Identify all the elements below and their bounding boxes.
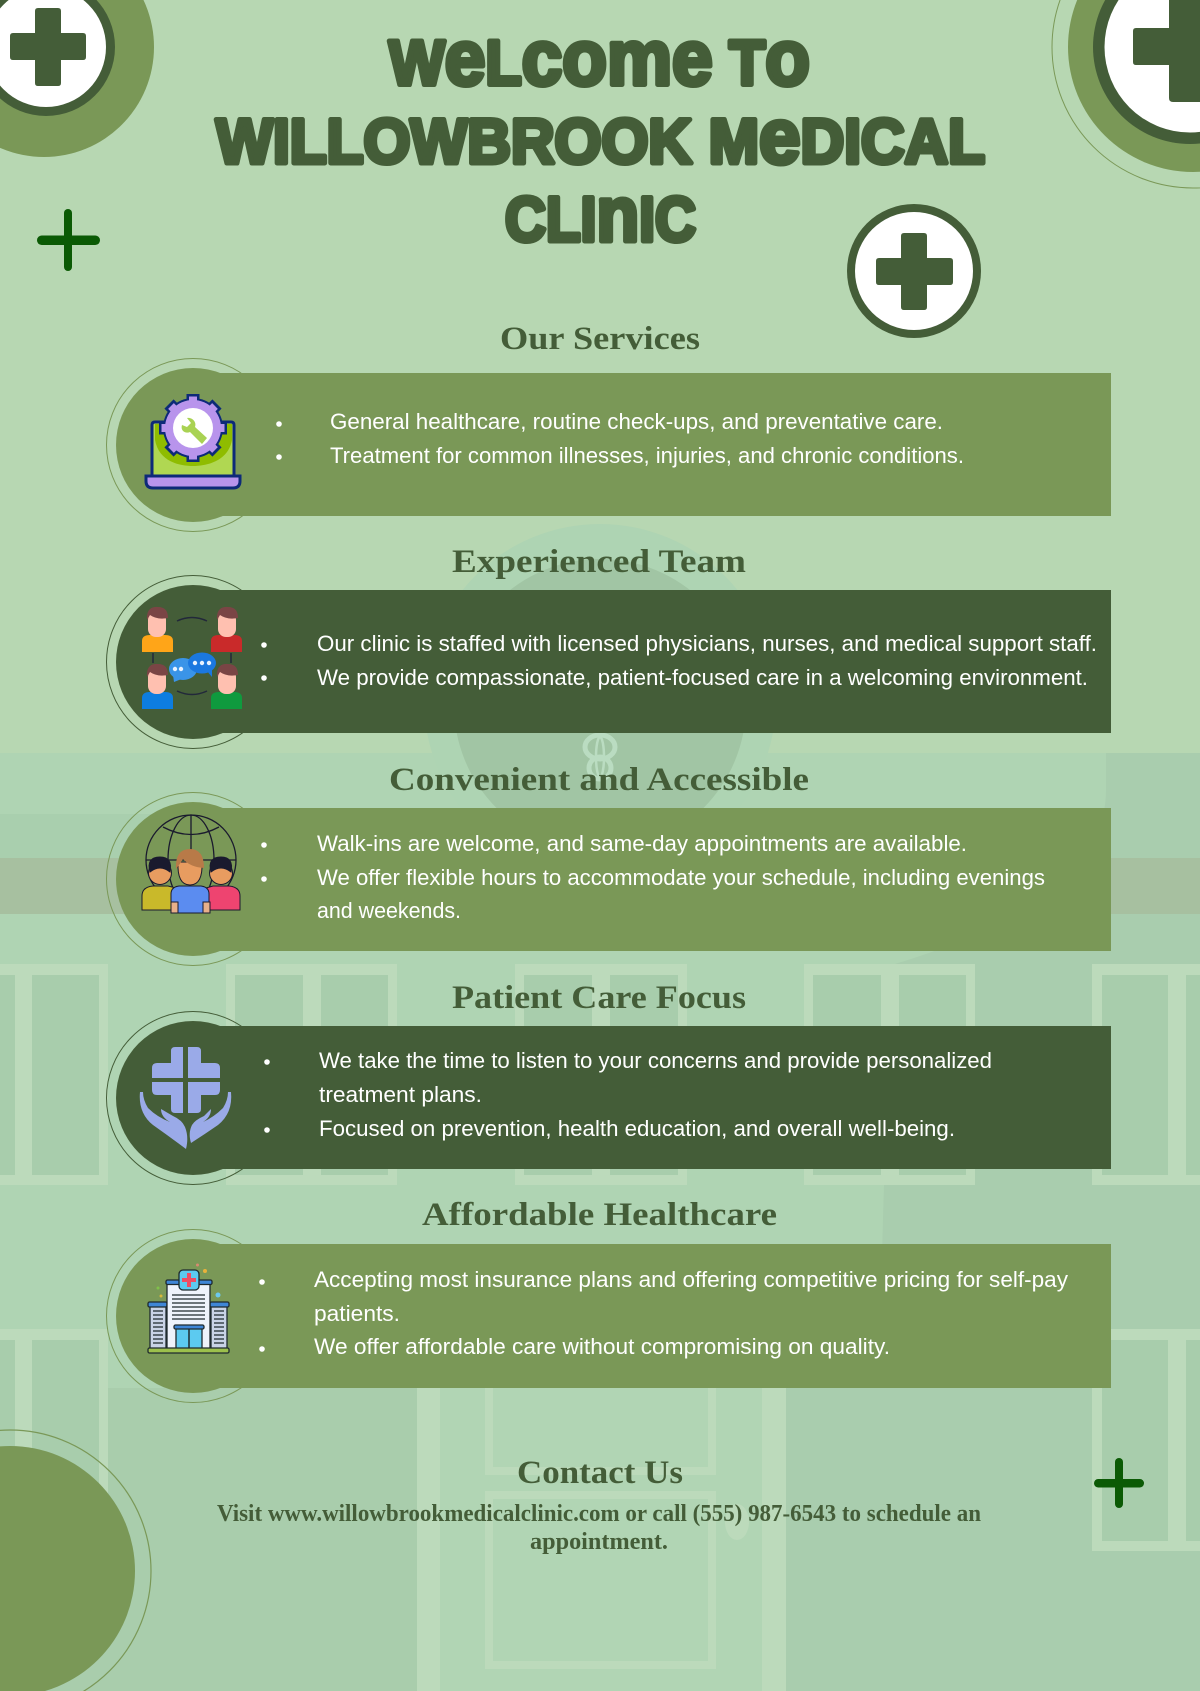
- panel: Experienced Team: [106, 576, 1111, 748]
- heading: Contact Us: Contact Us: [517, 1455, 683, 1491]
- bullet list: We provide compassionate, patient-focused care in a welcoming environment.: [317, 665, 1088, 690]
- icon: cross held by hands: [140, 1047, 231, 1149]
- bullet list: Walk-ins are welcome, and same-day appointments are available.: [317, 831, 967, 856]
- decorative plus: lower right: [1094, 1458, 1144, 1508]
- bullet list: Accepting most insurance plans and offering competitive pricing for self-pay: [314, 1267, 1069, 1292]
- upper windows: [0, 964, 1200, 1691]
- icon: laptop with gear and wrench: [146, 394, 240, 488]
- bullet list: [264, 1048, 992, 1141]
- bullet list: General healthcare, routine check-ups, and preventative care.: [330, 409, 943, 434]
- decorative badge: medical cross under title: [847, 204, 981, 338]
- bullet list: and weekends.: [317, 898, 461, 923]
- title: CLInIC: [505, 170, 696, 258]
- decorative badge: top right medical cross: [1052, 0, 1200, 188]
- bullet list: We offer flexible hours to accommodate your schedule, including evenings: [317, 865, 1045, 890]
- caduceus symbol: [585, 735, 615, 779]
- bullet list: [261, 631, 1097, 690]
- heading: Our Services: Our Services: [500, 321, 700, 357]
- bullet list: We offer affordable care without compromising on quality.: [314, 1334, 890, 1359]
- bullet list: Our clinic is staffed with licensed physicians, nurses, and medical support staff.: [317, 631, 1097, 656]
- heading: Experienced Team: Experienced Team: [452, 544, 746, 580]
- title: WILLOWBROOK MeDICAL: [216, 92, 985, 180]
- decorative badge: top left medical cross: [0, 0, 154, 157]
- icon: team with chat bubbles: [142, 607, 242, 709]
- icon: people in front of globe: [142, 815, 240, 913]
- bullet list: Treatment for common illnesses, injuries, and chronic conditions.: [330, 443, 964, 468]
- heading: Convenient and Accessible: Convenient and Accessible: [389, 762, 809, 798]
- bullet list: We take the time to listen to your concerns and provide personalized: [319, 1048, 992, 1073]
- contact text: Visit www.willowbrookmedicalclinic.com or call (555) 987-6543 to schedule an: [217, 1500, 981, 1527]
- title: WeLcome To: [389, 14, 810, 102]
- bullet list: [259, 1267, 1069, 1359]
- decorative plus: top left: [37, 209, 100, 271]
- bullet list: treatment plans.: [319, 1082, 482, 1107]
- heading: Affordable Healthcare: Affordable Healthcare: [422, 1197, 777, 1233]
- bullet list: [261, 831, 1045, 923]
- title: [216, 14, 985, 258]
- panel: Affordable Healthcare: [106, 1230, 1111, 1402]
- panel: Patient Care Focus: [106, 1012, 1111, 1184]
- heading: Patient Care Focus: Patient Care Focus: [452, 980, 746, 1016]
- bullet list: Focused on prevention, health education, and overall well-being.: [319, 1116, 955, 1141]
- icon: hospital building: [148, 1264, 229, 1353]
- contact text: [217, 1500, 981, 1555]
- decorative circle: bottom left: [0, 1430, 151, 1691]
- contact text: appointment.: [530, 1528, 668, 1555]
- bullet list: [276, 409, 964, 468]
- bullet list: patients.: [314, 1301, 400, 1326]
- panel: Our Services: [106, 358, 1111, 532]
- panel: Convenient and Accessible: [106, 792, 1111, 966]
